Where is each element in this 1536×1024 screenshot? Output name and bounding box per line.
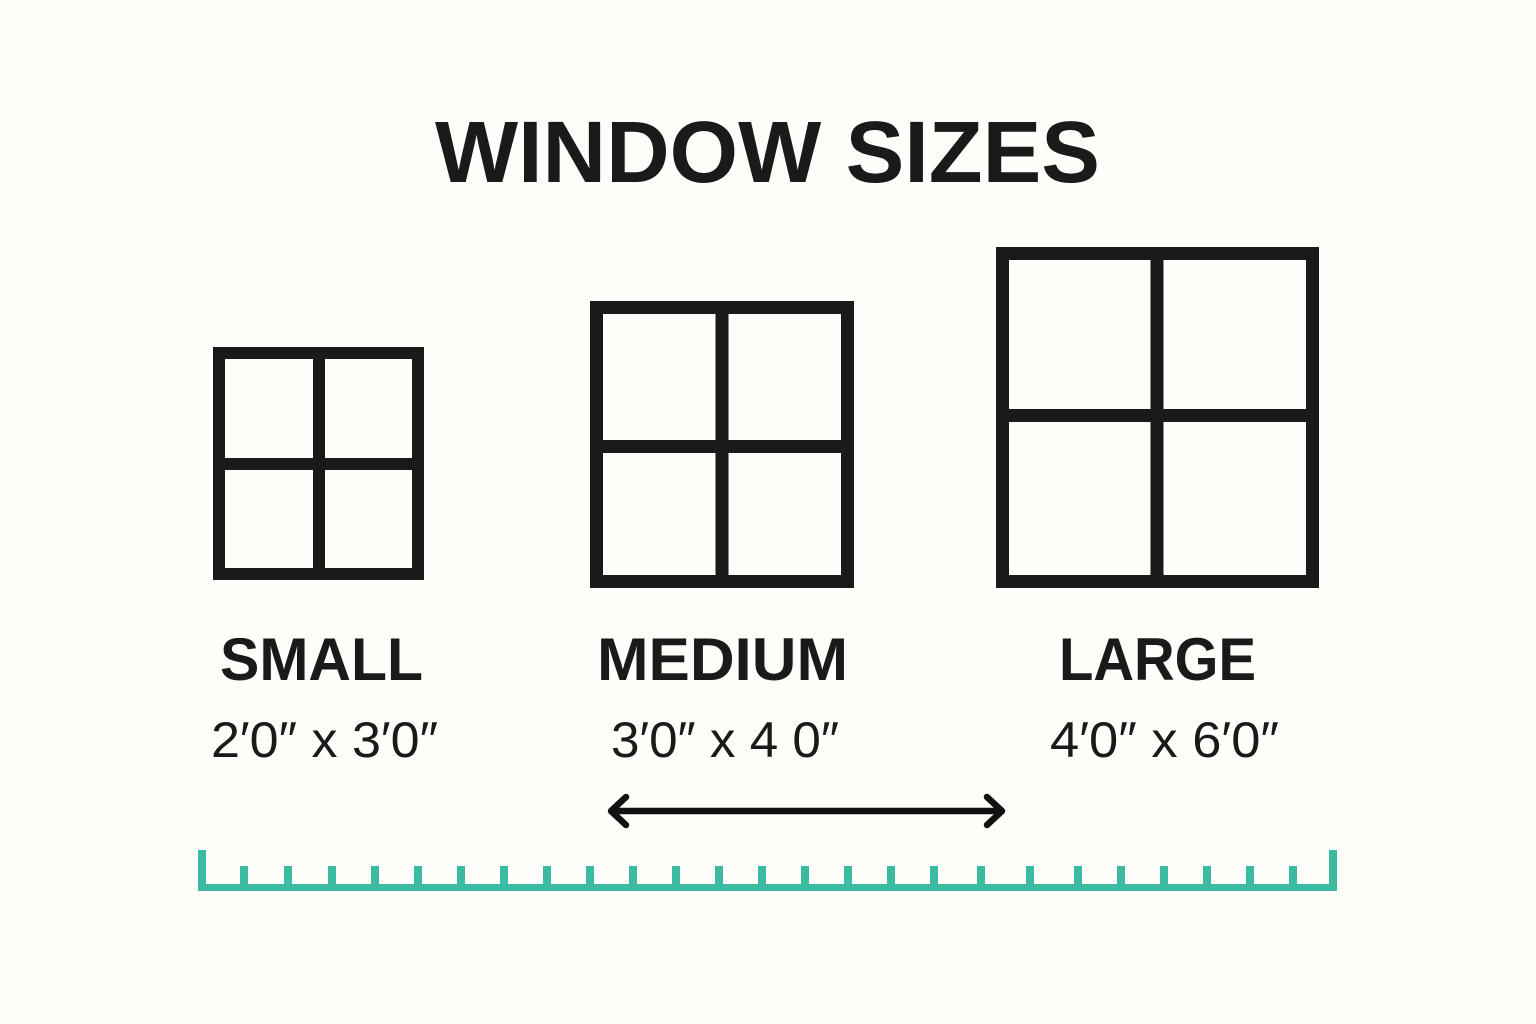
label: small: SMALL <box>220 626 423 693</box>
label: medium <box>597 626 848 768</box>
label: small: 2′0″ x 3′0″ <box>211 712 438 768</box>
label: medium: 3′0″ x 4 0″ <box>611 712 839 768</box>
ruler <box>198 850 1337 891</box>
label: large: LARGE <box>1059 626 1256 693</box>
label: small <box>211 626 438 768</box>
medium window <box>596 307 848 582</box>
large window <box>1002 253 1313 582</box>
title: WINDOW SIZES <box>435 104 1100 201</box>
arrow: double-headed <box>611 797 1002 825</box>
label: medium: MEDIUM <box>597 626 848 693</box>
label: large <box>1050 626 1279 768</box>
label: large: 4′0″ x 6′0″ <box>1050 712 1279 768</box>
small window <box>219 353 418 574</box>
